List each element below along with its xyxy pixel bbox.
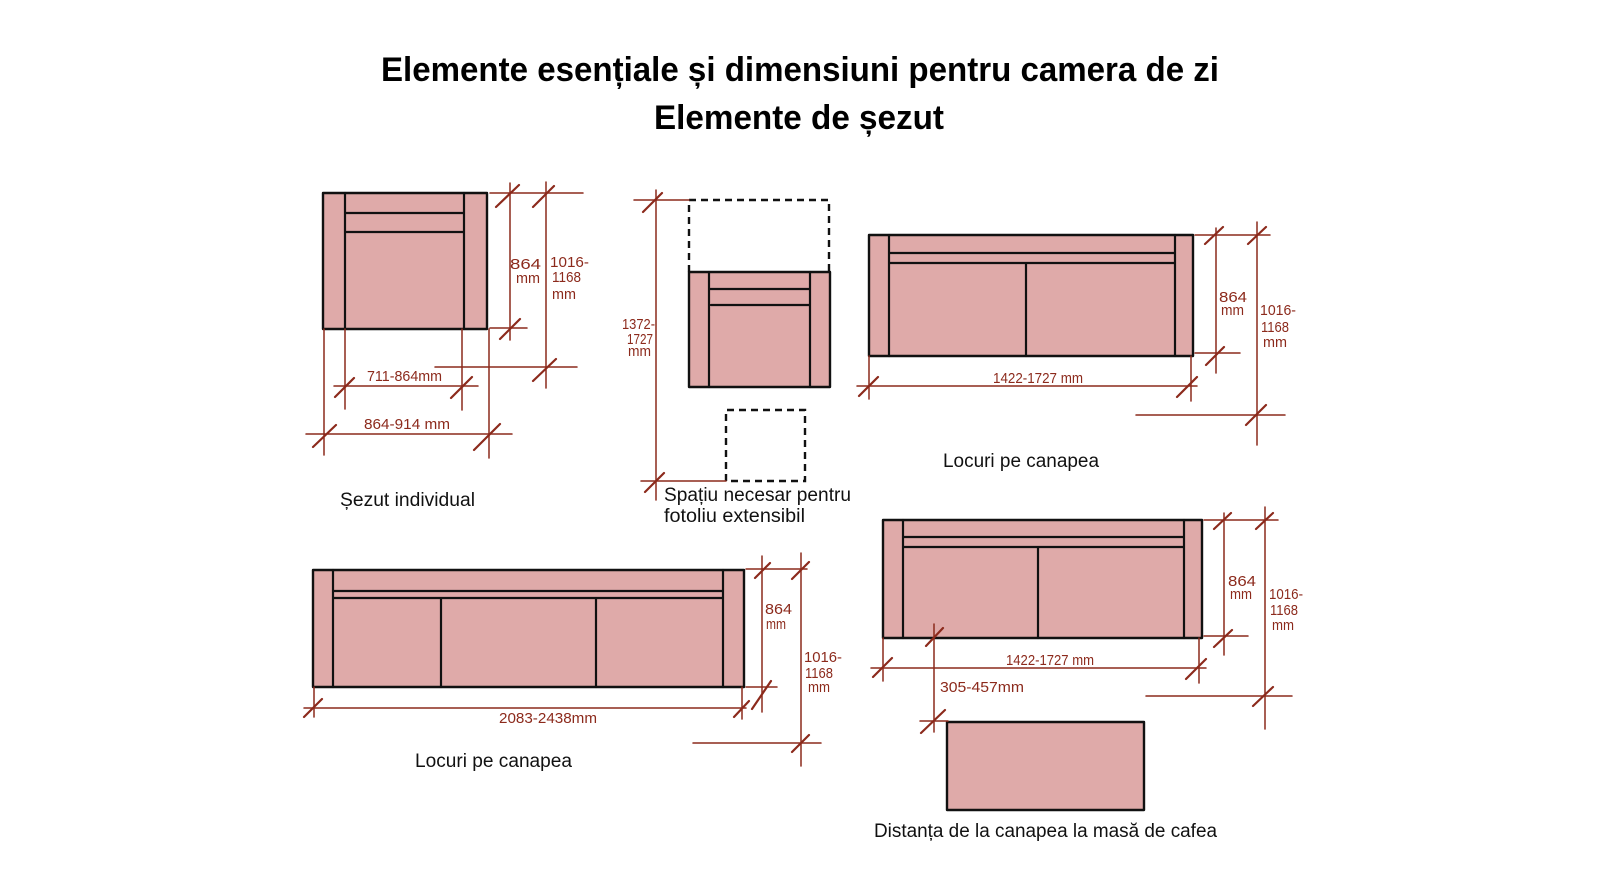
dimension labels: 2083-2438mm (499, 710, 597, 727)
dimension labels: 711-864mm (367, 368, 442, 385)
dimension lines (304, 553, 821, 766)
dimension labels: 1168 (1261, 319, 1289, 336)
dimension labels: 864 (510, 256, 541, 273)
dimension labels: 1422-1727 mm (993, 370, 1083, 387)
sofa plan (883, 520, 1202, 638)
caption: Șezut individual (340, 490, 475, 511)
dimension labels (364, 254, 589, 433)
dimension labels: mm (1272, 617, 1294, 634)
dimension labels: 1422-1727 mm (1006, 652, 1094, 669)
dimension lines (634, 190, 726, 500)
dimension labels (940, 573, 1303, 696)
dimension labels (622, 316, 655, 360)
dimension labels: mm (552, 286, 576, 303)
caption: fotoliu extensibil (664, 506, 805, 527)
sofa plan (869, 235, 1193, 356)
dimension labels: mm (1263, 334, 1287, 351)
dimension labels: 1016- (550, 254, 589, 271)
dimension labels: 1168 (552, 269, 581, 286)
dimension labels: 1168 (1270, 602, 1298, 619)
dimension labels: 864-914 mm (364, 416, 450, 433)
dimension labels (499, 601, 842, 727)
panel: single seat (306, 182, 589, 511)
dimension labels: mm (1230, 586, 1252, 603)
dimension lines (871, 507, 1292, 733)
dimension labels: 1727 (627, 331, 653, 348)
dimension labels: mm (1221, 302, 1244, 319)
title: Elemente de șezut (654, 99, 944, 137)
dimension labels: 1016- (804, 649, 842, 666)
dimension labels: mm (628, 343, 651, 360)
panel: two-seat sofa (857, 222, 1296, 472)
caption: Distanța de la canapea la masă de cafea (874, 821, 1217, 842)
caption (664, 485, 851, 527)
title (381, 51, 1219, 137)
panel: three-seat sofa (304, 553, 842, 772)
sofa plan (313, 570, 744, 687)
dimension labels: mm (808, 679, 830, 696)
dimension lines (306, 182, 583, 458)
dimension labels (993, 289, 1296, 387)
dimension labels: 864 (1228, 573, 1256, 590)
panel: recliner clearance (622, 190, 851, 527)
dimension labels: 1016- (1269, 586, 1303, 603)
caption: Locuri pe canapea (943, 451, 1099, 472)
caption: Locuri pe canapea (415, 751, 572, 772)
caption: Spațiu necesar pentru (664, 485, 851, 506)
dimension lines (857, 222, 1285, 445)
panel: sofa to coffee table (871, 507, 1303, 842)
title: Elemente esențiale și dimensiuni pentru camera de zi (381, 51, 1219, 89)
armchair plan (323, 193, 487, 329)
recliner plan (689, 200, 830, 481)
dimension labels: 1372- (622, 316, 655, 333)
dimension labels: 1016- (1260, 302, 1296, 319)
dimension labels: 864 (1219, 289, 1247, 306)
coffee table (947, 722, 1144, 810)
dimension labels: mm (516, 270, 540, 287)
dimension labels: 305-457mm (940, 679, 1024, 696)
dimension labels: 1168 (805, 665, 833, 682)
dimension labels: 864 (765, 601, 792, 618)
dimension labels: mm (766, 616, 786, 633)
